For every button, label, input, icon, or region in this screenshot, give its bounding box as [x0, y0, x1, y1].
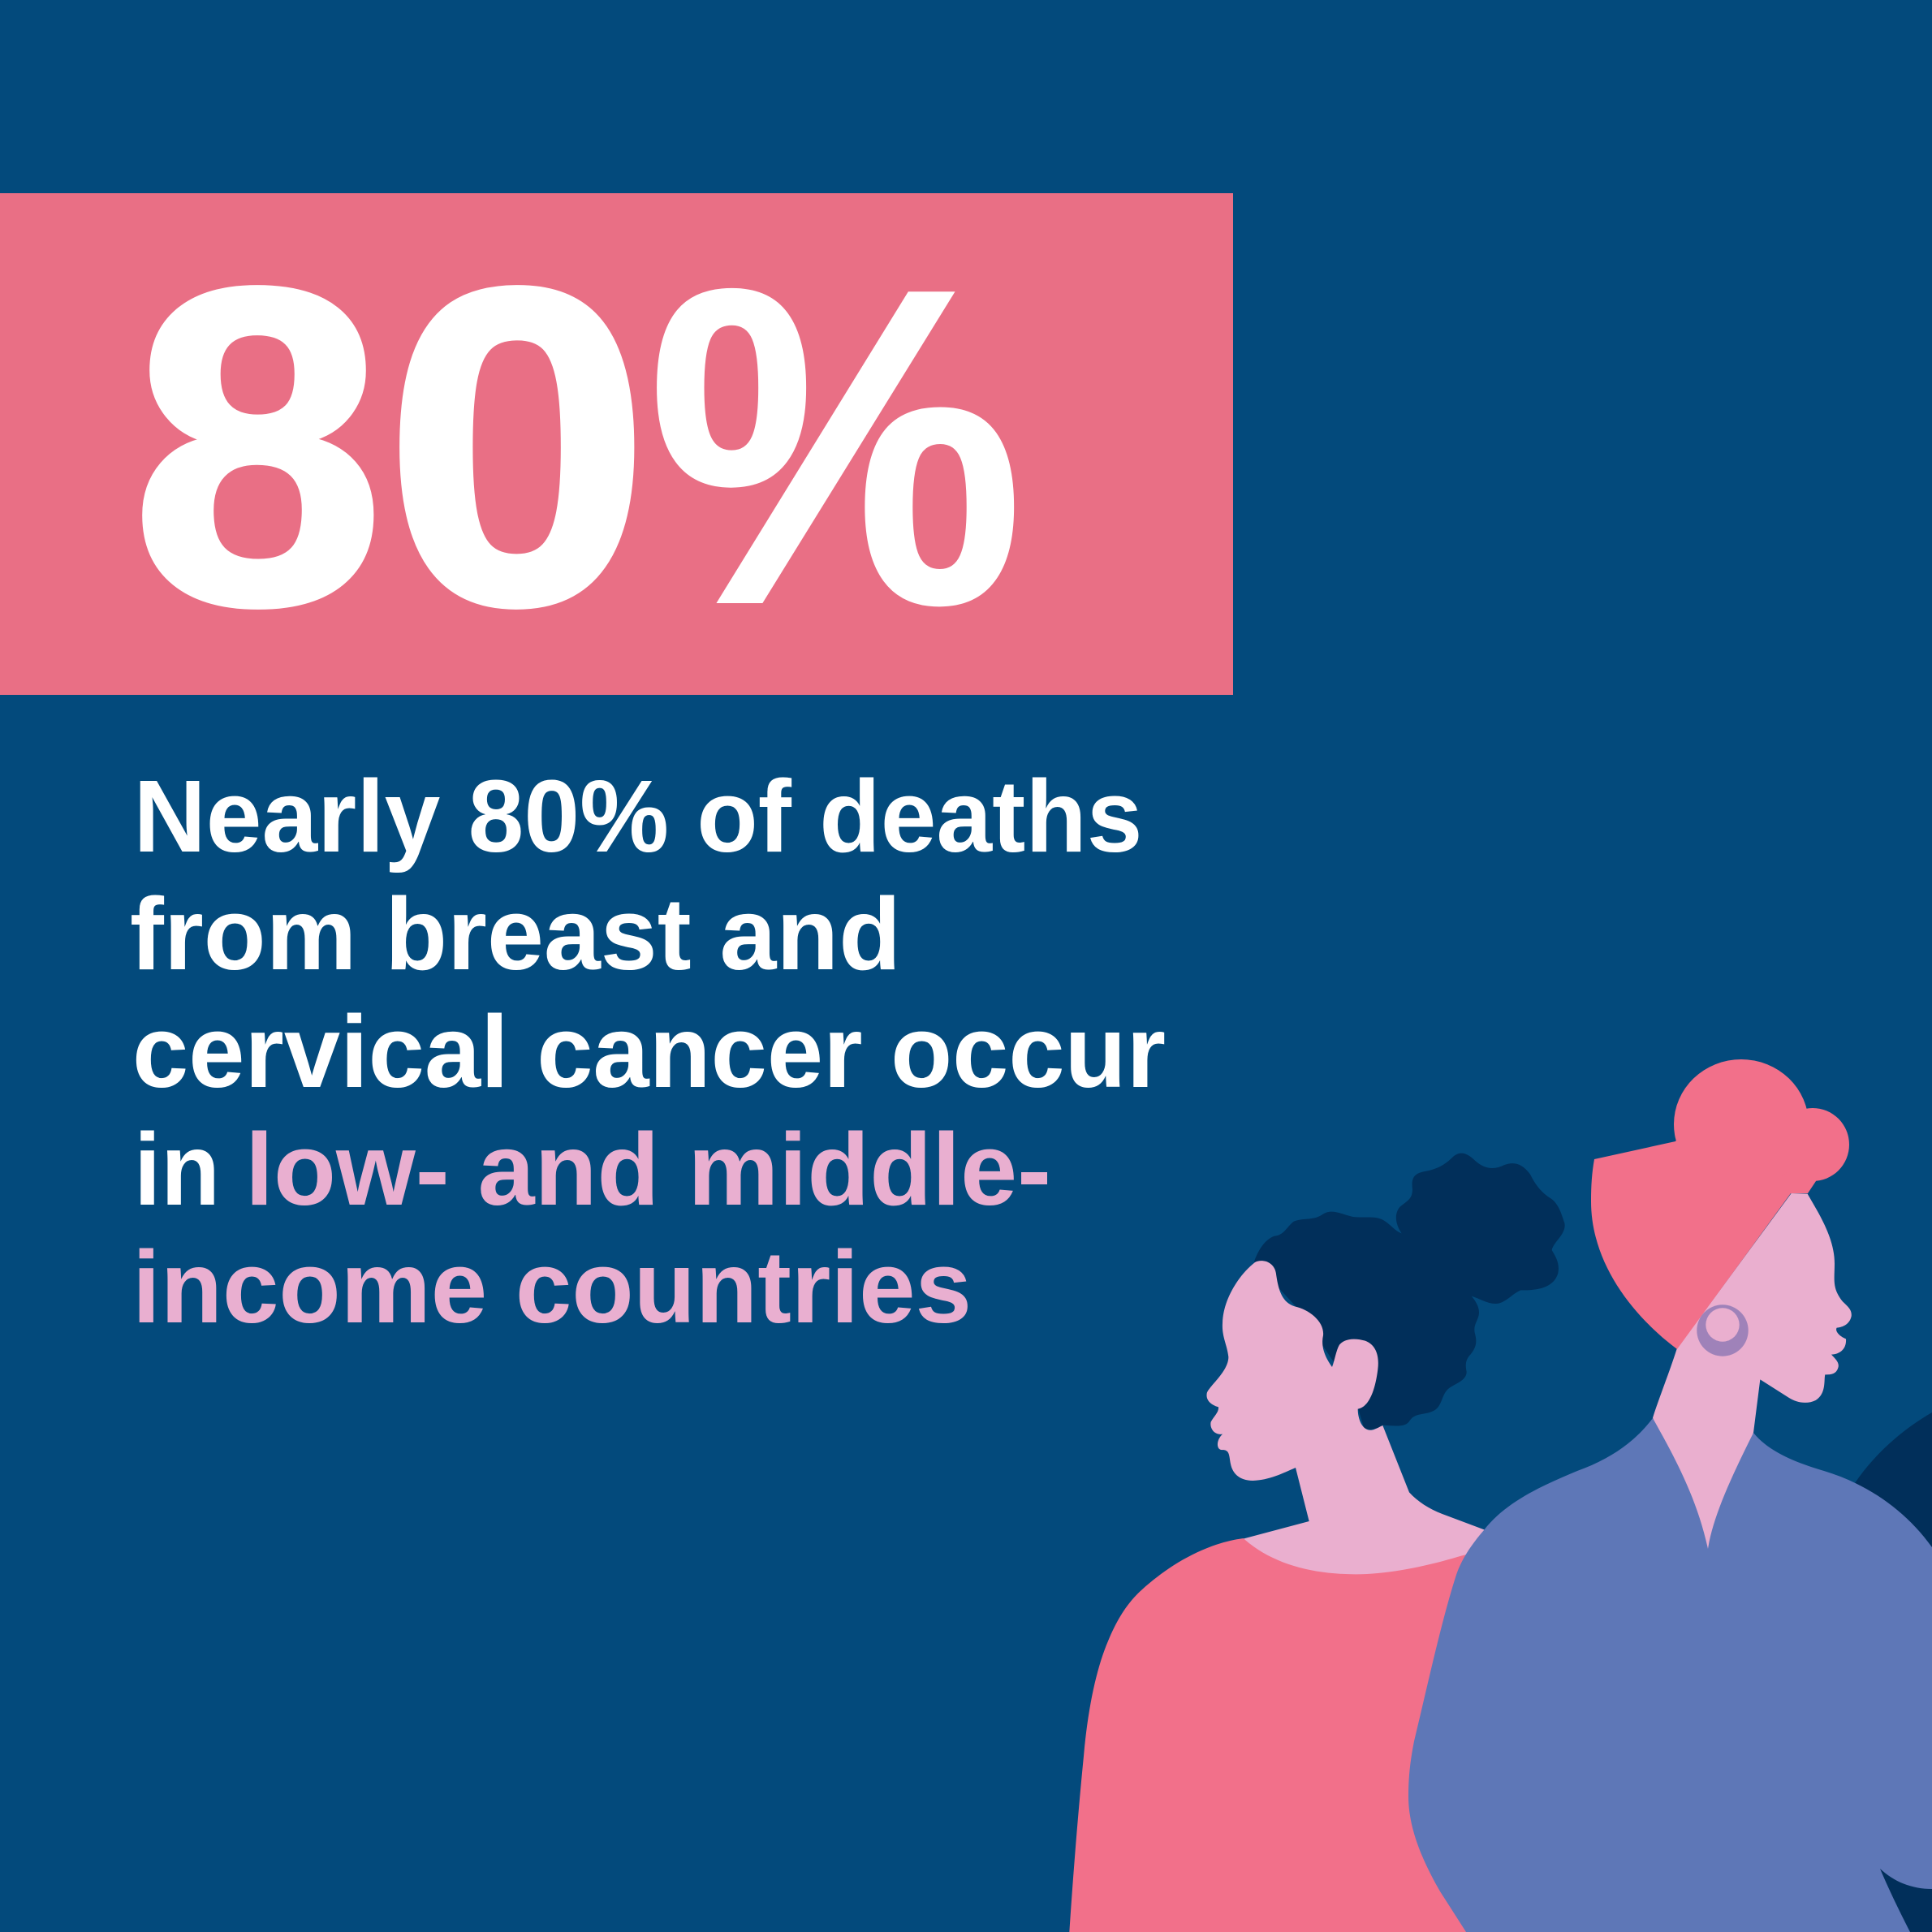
text block: description: Nearly 80% of deaths	[133, 759, 1143, 873]
left woman	[1069, 1154, 1565, 1932]
big number	[132, 196, 1024, 696]
big number: 8	[132, 196, 384, 696]
text block: description	[130, 759, 1166, 1344]
panel: headline statistic	[0, 193, 1233, 696]
text block: description: from breast and	[130, 877, 901, 991]
big number: %	[648, 196, 1024, 696]
right woman	[1408, 1059, 1932, 1932]
big number: 0	[385, 196, 650, 696]
text block: description: in	[134, 1112, 220, 1227]
coral shirt	[1069, 1538, 1516, 1932]
face and neck	[1206, 1261, 1494, 1597]
text block: description: income countries	[132, 1230, 972, 1344]
text block: description: low- and middle-	[245, 1112, 1051, 1227]
hair	[1254, 1154, 1565, 1430]
blue jacket	[1408, 1418, 1932, 1932]
illustration: two women in profile	[1069, 1059, 1932, 1932]
earring	[1697, 1305, 1749, 1356]
text block: description: cervical cancer occur	[132, 994, 1166, 1109]
turban	[1591, 1059, 1849, 1349]
dark circle behind	[1855, 1412, 1932, 1932]
face and neck	[1653, 1193, 1852, 1553]
